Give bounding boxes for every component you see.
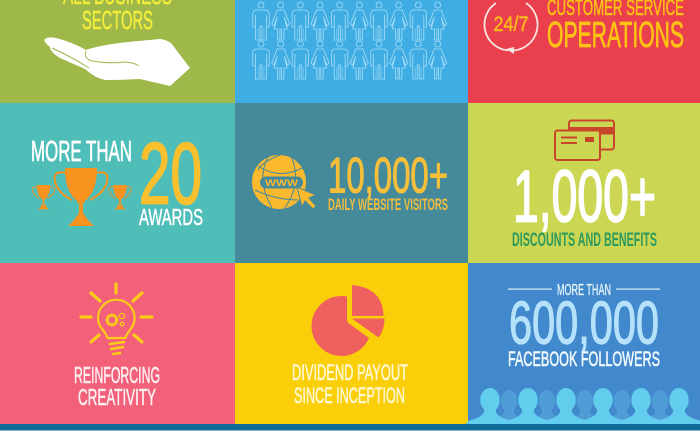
icon: rows of people <box>253 2 447 79</box>
text: reinforcing creativity: CREATIVITY <box>78 384 156 410</box>
number: 10,000+: 10,000+ <box>328 148 448 204</box>
panel: website visitors <box>235 103 468 263</box>
panel: people <box>235 0 468 103</box>
panel: all business sectors <box>0 0 235 103</box>
panel: awards <box>0 103 235 263</box>
panel: discounts <box>468 103 700 263</box>
heading: all business sectors: SECTORS <box>82 5 153 35</box>
heading: all business sectors <box>63 0 172 35</box>
icon: open hand <box>44 37 190 86</box>
icon: 24/7 cycle <box>484 3 538 54</box>
bottom strip <box>0 424 700 430</box>
text: dividend payout since inception <box>292 360 408 408</box>
icon: crowd <box>466 388 700 424</box>
icon: trophies <box>32 168 131 226</box>
icon: www globe <box>252 155 316 209</box>
text: reinforcing creativity: REINFORCING <box>74 362 160 388</box>
icon: light bulb <box>81 284 152 354</box>
icon: 24/7 cycle: 24/7 <box>494 13 528 36</box>
panel: facebook <box>466 263 700 424</box>
text: awards: AWARDS <box>139 204 203 230</box>
text: more than: MORE THAN <box>31 136 132 168</box>
text: reinforcing creativity <box>74 362 160 410</box>
panel: dividend <box>235 263 468 424</box>
icon: www globe: WWW <box>265 178 298 189</box>
icon: cards <box>555 120 614 160</box>
number: 20: 20 <box>139 126 202 222</box>
panel: customer service <box>468 0 700 103</box>
text: dividend payout since inception: SINCE INCEPTION <box>294 383 405 408</box>
text: more than with rules: MORE THAN <box>557 282 611 299</box>
heading: customer service operations <box>547 0 684 55</box>
icon: pie chart <box>312 285 384 356</box>
text: dividend payout since inception: DIVIDEND PAYOUT <box>292 360 408 385</box>
text: daily website visitors: DAILY WEBSITE VISITORS <box>328 195 448 214</box>
panel: creativity <box>0 263 235 424</box>
